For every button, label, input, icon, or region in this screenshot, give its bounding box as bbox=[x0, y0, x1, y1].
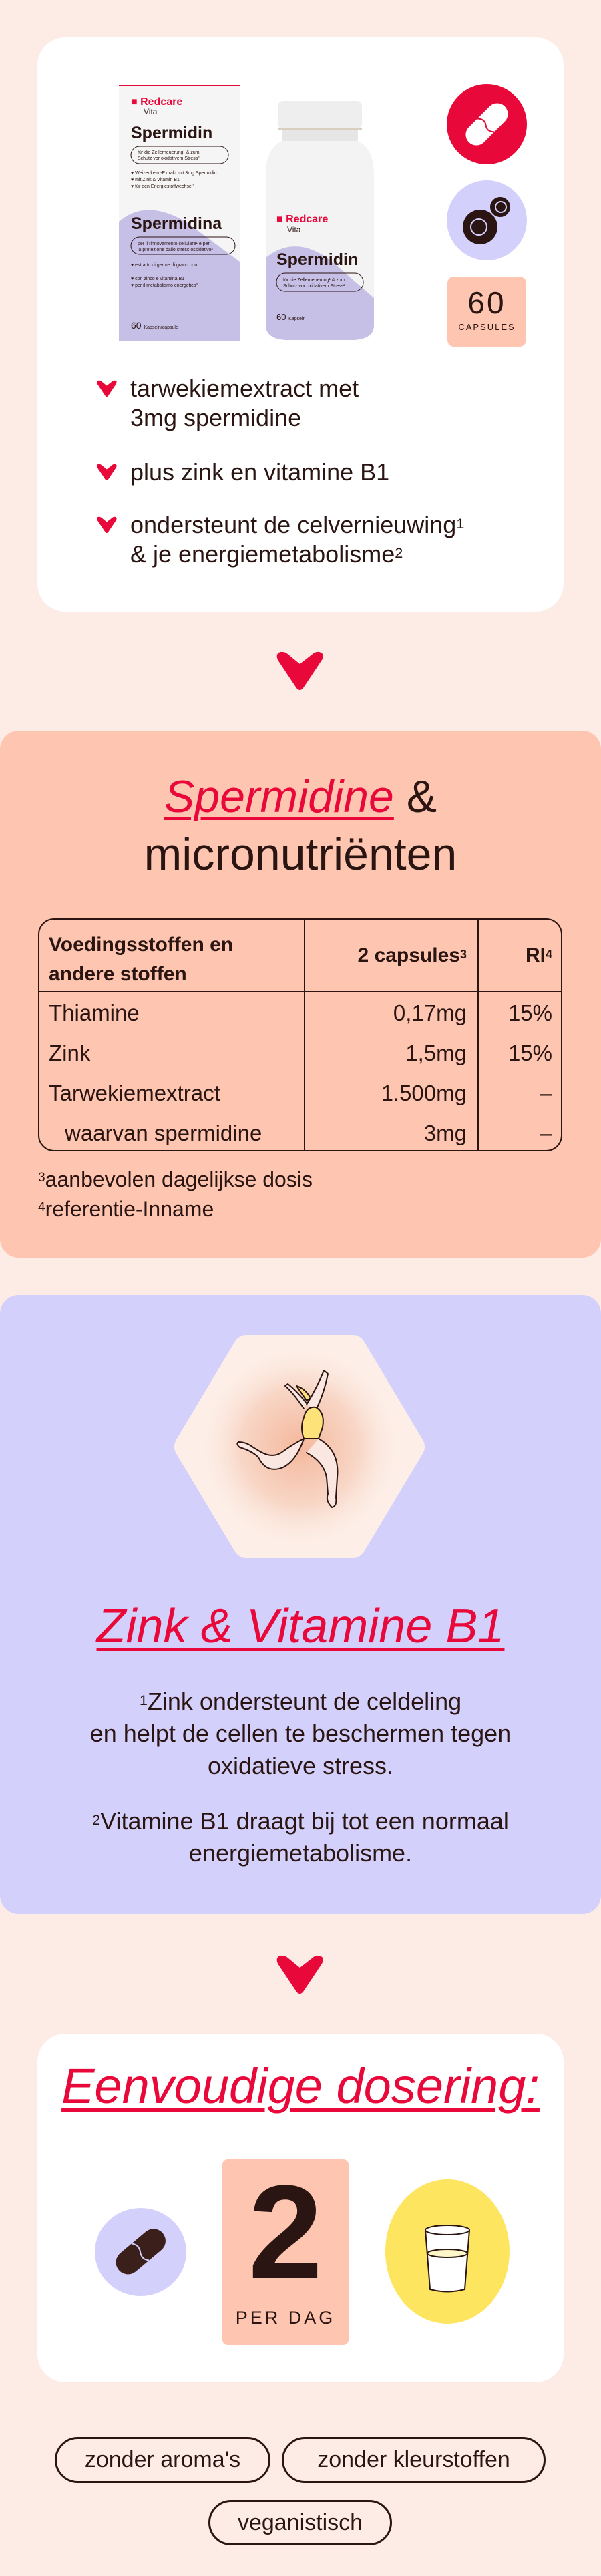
bullet 3: & je energiemetabolisme2 bbox=[130, 540, 403, 568]
table: 1.500mg bbox=[381, 1081, 467, 1105]
footnotes: 4referentie-Inname bbox=[38, 1197, 214, 1221]
heading: Eenvoudige dosering: bbox=[61, 2058, 540, 2114]
badge: 60 capsules: 60 bbox=[467, 285, 506, 320]
product box image: Spermidin bbox=[131, 124, 212, 142]
icon: cells bbox=[447, 180, 527, 260]
table: Tarwekiemextract bbox=[49, 1081, 220, 1105]
badge: 2 per dag: 2 bbox=[248, 2158, 323, 2307]
icon: heart bbox=[97, 517, 117, 533]
tag: zonder aroma's: zonder aroma's bbox=[85, 2447, 240, 2472]
heading: Zink & Vitamine B1 bbox=[97, 1600, 504, 1653]
text: vitamine B1: 2Vitamine B1 draagt bij tot een normaal bbox=[92, 1807, 509, 1835]
icon: capsule bbox=[447, 84, 527, 164]
text: zink bbox=[90, 1688, 511, 1779]
tag: veganistisch: veganistisch bbox=[238, 2510, 363, 2535]
table: – bbox=[540, 1121, 552, 1145]
panel: dosage bbox=[37, 2034, 564, 2382]
product box image: Schutz vor oxidativem Stress² bbox=[138, 156, 200, 161]
text: zink: 1Zink ondersteunt de celdeling bbox=[140, 1688, 461, 1715]
text: zink: oxidatieve stress. bbox=[208, 1752, 393, 1779]
footnotes bbox=[38, 1167, 313, 1221]
text: vitamine B1: energiemetabolisme. bbox=[189, 1839, 412, 1867]
table: 15% bbox=[508, 1041, 552, 1065]
table: 15% bbox=[508, 1000, 552, 1025]
table: 0,17mg bbox=[393, 1000, 467, 1025]
arrow: heart 1 bbox=[276, 652, 323, 690]
table: andere stoffen bbox=[49, 963, 187, 985]
product box image: ■ Redcare bbox=[131, 96, 182, 108]
table: waarvan spermidine bbox=[65, 1121, 262, 1145]
icon: heart bbox=[97, 381, 117, 397]
product box image: ♥ con zinco e vitamina B1 bbox=[131, 277, 184, 281]
table: Thiamine bbox=[49, 1000, 140, 1025]
table: Voedingsstoffen en bbox=[49, 934, 233, 956]
table: RI4 bbox=[526, 944, 552, 966]
icon: glass of water bbox=[385, 2179, 510, 2324]
product box image: ♥ mit Zink & Vitamin B1 bbox=[131, 178, 180, 182]
product bottle image: ■ Redcare bbox=[276, 214, 328, 225]
product box image: für die Zellerneuerung¹ & zum bbox=[138, 150, 200, 155]
product bottle image: Spermidin bbox=[276, 250, 358, 269]
table: – bbox=[540, 1081, 552, 1105]
product bottle image: Schutz vor oxidativem Stress² bbox=[283, 284, 345, 289]
product bottle image: 60 Kapseln bbox=[276, 312, 305, 322]
product box image: ♥ estratto di germe di grano con bbox=[131, 263, 197, 268]
product box image: per il rinnovamento cellulare¹ e per bbox=[138, 242, 210, 246]
heading: Spermidine & bbox=[164, 771, 437, 822]
arrow: heart 2 bbox=[276, 1956, 323, 1994]
heading: micronutriënten bbox=[144, 829, 457, 880]
product bottle image: für die Zellerneuerung¹ & zum bbox=[283, 278, 345, 283]
product box image: ♥ für den Energiestoffwechsel³ bbox=[131, 184, 194, 189]
icon: heart bbox=[97, 464, 117, 481]
bullet 3 bbox=[97, 511, 464, 568]
tag: zonder kleurstoffen bbox=[282, 2437, 546, 2483]
bullet 1: 3mg spermidine bbox=[130, 404, 301, 431]
illustration: hexagon with dancer bbox=[174, 1335, 425, 1558]
tag: zonder aroma's bbox=[55, 2437, 270, 2483]
table: 1,5mg bbox=[405, 1041, 467, 1065]
product box image: la protezione dallo stress ossidativo² bbox=[138, 248, 214, 252]
panel: product card bbox=[37, 37, 564, 612]
badge: 2 per dag: PER DAG bbox=[236, 2308, 335, 2328]
product box image: ♥ per il metabolismo energetico³ bbox=[131, 283, 198, 288]
footnotes: 3aanbevolen dagelijkse dosis bbox=[38, 1167, 313, 1191]
bullet 1 bbox=[97, 375, 359, 431]
tag: veganistisch bbox=[208, 2500, 392, 2545]
icon: capsule bbox=[95, 2208, 186, 2296]
bullet 2: plus zink en vitamine B1 bbox=[130, 458, 389, 486]
panel: zink & vitamine B1 bbox=[0, 1295, 601, 1914]
table: Zink bbox=[49, 1041, 90, 1065]
bullet 1: tarwekiemextract met bbox=[130, 375, 359, 402]
product box image: ♥ Weizenkeim-Extrakt mit 3mg Spermidin bbox=[131, 171, 217, 176]
product box image: 60 Kapseln/capsule bbox=[131, 320, 178, 331]
product box image: Spermidina bbox=[131, 214, 222, 233]
badge: 60 capsules bbox=[447, 277, 526, 347]
text: zink: en helpt de cellen te beschermen tegen bbox=[90, 1720, 511, 1747]
tag: zonder kleurstoffen: zonder kleurstoffen bbox=[317, 2447, 510, 2472]
product box image: Vita bbox=[144, 107, 158, 116]
bullet 3: ondersteunt de celvernieuwing1 bbox=[130, 511, 464, 538]
heading bbox=[144, 771, 457, 880]
text: vitamine B1 bbox=[92, 1807, 509, 1867]
badge: 2 per dag bbox=[222, 2159, 349, 2345]
product bottle image: Vita bbox=[287, 225, 301, 234]
product bottle image bbox=[266, 101, 374, 340]
panel: spermidine & micronutrients bbox=[0, 731, 601, 1258]
table: 3mg bbox=[424, 1121, 467, 1145]
table bbox=[38, 918, 562, 1151]
table: 2 capsules3 bbox=[358, 944, 467, 966]
product box image bbox=[119, 85, 240, 341]
badge: 60 capsules: CAPSULES bbox=[458, 322, 516, 332]
